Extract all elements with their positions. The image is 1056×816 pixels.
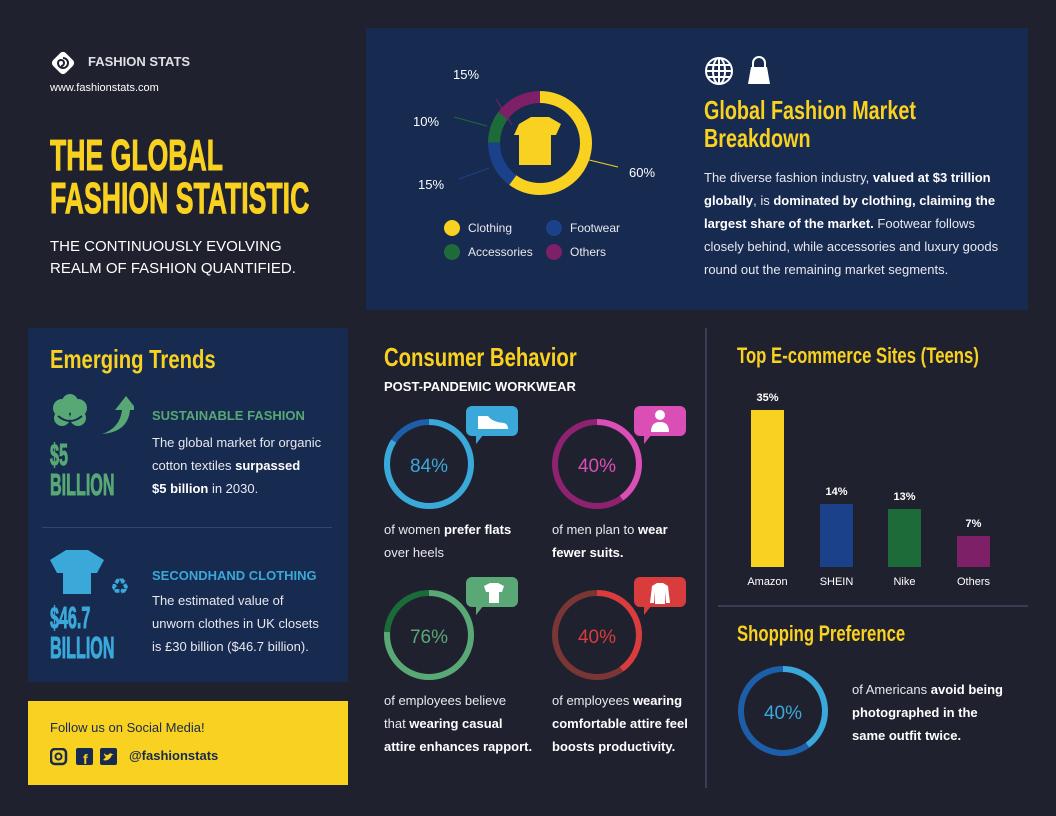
captions	[384, 522, 511, 560]
icons: globe and bag	[705, 56, 770, 85]
subtitle: THE CONTINUOUSLY EVOLVING	[50, 238, 282, 255]
text: of employees believe	[384, 693, 506, 708]
ring 76	[387, 577, 518, 677]
subtitle	[50, 238, 296, 277]
stat: $5 billion: $5	[50, 437, 68, 472]
shopping text: of Americans avoid being	[852, 682, 1003, 697]
bar chart: 7%	[966, 518, 982, 530]
bar chart: SHEIN	[820, 576, 853, 588]
title: FASHION STATISTIC	[50, 174, 309, 223]
panel: social: Follow us on Social Media!	[50, 720, 205, 735]
donut chart: 60%	[629, 165, 655, 180]
shopping text: photographed in the	[852, 705, 978, 720]
legend: Clothing	[468, 221, 512, 235]
ring 84: 84%	[410, 456, 448, 477]
stat: $46.7 billion	[50, 600, 114, 665]
sustainable fashion text	[152, 408, 321, 496]
ring 76: 76%	[410, 627, 448, 648]
text: attire enhances rapport.	[384, 739, 532, 754]
logo: FASHION STATS	[88, 54, 190, 69]
stat: $46.7 billion: BILLION	[50, 630, 114, 665]
donut chart: 15%	[453, 67, 479, 82]
ring: shopping 40: 40%	[764, 703, 802, 724]
logo	[50, 52, 190, 94]
title	[50, 131, 309, 223]
captions: over heels	[384, 545, 444, 560]
shopping text: same outfit twice.	[852, 728, 961, 743]
stat: $5 billion	[50, 437, 114, 502]
stat: $46.7 billion: $46.7	[50, 600, 90, 635]
icon: cotton and arrow	[53, 394, 134, 434]
captions: of women prefer flats	[384, 522, 511, 537]
icon: tshirt and recycle	[50, 550, 130, 594]
heading: shopping preference: Shopping Preference	[737, 621, 905, 646]
heading: Global Fashion Market	[704, 95, 916, 125]
social icons	[50, 748, 117, 766]
bar chart	[747, 392, 991, 588]
panel: social: @fashionstats	[129, 748, 218, 763]
text: that wearing casual	[384, 716, 503, 731]
panel: global market	[366, 28, 1028, 310]
heading: Emerging Trends	[50, 344, 216, 374]
ring 40 red	[555, 577, 686, 677]
subheading: POST-PANDEMIC WORKWEAR	[384, 379, 576, 394]
bar chart: 13%	[893, 491, 916, 503]
text: boosts productivity.	[552, 739, 675, 754]
secondhand text: SECONDHAND CLOTHING	[152, 568, 317, 583]
secondhand text: unworn clothes in UK closets	[152, 616, 319, 631]
heading	[704, 95, 916, 153]
ring: shopping 40	[738, 666, 828, 756]
ring 40 men: 40%	[578, 456, 616, 477]
secondhand text	[152, 568, 319, 654]
heading: Breakdown	[704, 123, 811, 153]
subtitle: REALM OF FASHION QUANTIFIED.	[50, 260, 296, 277]
sustainable fashion text: The global market for organic cotton textiles surpassed	[152, 435, 321, 473]
text block: The diverse fashion industry, valued at $3 trillion globally, is dominated by clothing, claiming the largest share of the market. Footwear follows closely behind, while accessories and luxury goods round out the remaining market segments.	[704, 170, 998, 277]
text: fewer suits.	[552, 545, 624, 560]
legend: Others	[570, 245, 606, 259]
panel: social	[28, 701, 348, 785]
bar chart: Others	[957, 576, 991, 588]
text: of employees wearing	[552, 693, 682, 708]
secondhand text: is £30 billion ($46.7 billion).	[152, 639, 309, 654]
donut chart: 10%	[413, 114, 439, 129]
title: THE GLOBAL	[50, 131, 223, 180]
sustainable fashion text: SUSTAINABLE FASHION	[152, 408, 305, 423]
shopping text	[852, 682, 1003, 743]
text: of men plan to wear	[552, 522, 668, 537]
legend: Footwear	[570, 221, 620, 235]
icon: logo diamond	[52, 52, 74, 74]
ring charts	[384, 406, 686, 680]
donut chart: 15%	[418, 177, 444, 192]
heading: consumer behavior: Consumer Behavior	[384, 342, 577, 372]
ring 40 red: 40%	[578, 627, 616, 648]
heading: e-commerce: Top E-commerce Sites (Teens)	[737, 343, 979, 368]
donut chart	[413, 67, 655, 195]
bar chart: 14%	[825, 486, 848, 498]
logo: www.fashionstats.com	[50, 82, 159, 94]
ring 84	[387, 406, 518, 506]
secondhand text: The estimated value of	[152, 593, 284, 608]
bar chart: 35%	[756, 392, 779, 404]
legend	[444, 220, 620, 260]
panel: emerging trends	[28, 328, 348, 682]
stat: $5 billion: BILLION	[50, 467, 114, 502]
text: comfortable attire feel	[552, 716, 688, 731]
bar chart: Amazon	[747, 576, 788, 588]
ring 40 men	[555, 406, 686, 506]
legend: Accessories	[468, 245, 533, 259]
sustainable fashion text: $5 billion in 2030.	[152, 481, 258, 496]
bar chart: Nike	[893, 576, 916, 588]
